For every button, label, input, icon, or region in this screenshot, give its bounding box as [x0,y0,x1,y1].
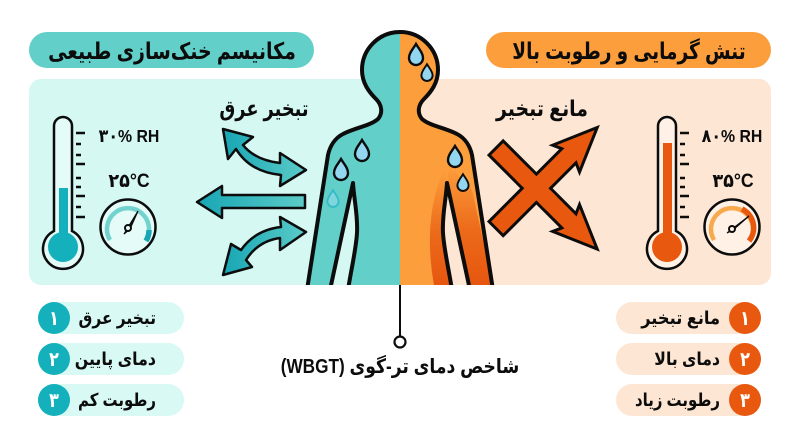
heading: heat stress and high humidity: تنش گرمایی و رطوبت بالا [512,38,746,65]
item: high humidity: ۳ [740,389,750,411]
thermometer: left [43,117,85,269]
panel: heat stress background [400,79,771,285]
readout: right humidity: ۸۰% RH [702,126,762,146]
heading: heat stress and high humidity [486,32,771,68]
illustration: human body [300,28,500,290]
item: high humidity [616,384,761,416]
arrow: upper curved double arrow [223,129,306,186]
gauge: left [100,200,156,254]
icon: blocked evaporation crossed arrows [483,114,611,263]
connector: body to WBGT label [394,285,406,348]
item: low temperature: دمای پایین [75,349,156,370]
label: WBGT index: شاخص دمای تر-گوی (WBGT) [281,355,519,378]
list: heat stress factors [616,302,761,416]
readout: left humidity: ۳۰% RH [99,126,159,146]
arrow: lower curved double arrow [223,217,306,275]
item: low humidity: ۳ [49,389,59,411]
item: high temperature [616,343,761,375]
item: low temperature [38,343,184,375]
item: sweat evaporation: ۱ [49,307,59,329]
gauge: right [704,200,760,254]
list: natural cooling factors [38,302,184,416]
heading: natural cooling mechanism: مکانیسم خنک‌سازی طبیعی [48,39,296,64]
item: evaporation blocked: مانع تبخیر [640,308,720,329]
item: high temperature: دمای بالا [654,349,720,369]
panel: natural cooling background [29,79,400,285]
readout: left temperature: ۲۵°C [108,169,150,191]
item: evaporation blocked [616,302,761,334]
item: high humidity: رطوبت زیاد [635,390,720,411]
arrow: middle outward arrow [197,186,305,218]
heading: natural cooling mechanism [29,32,314,68]
readout: right temperature: ۳۵°C [712,169,754,191]
thermometer: right [647,117,689,269]
item: high temperature: ۲ [740,348,750,370]
item: low humidity [38,384,184,416]
label: sweat evaporation: تبخیر عرق [219,97,309,121]
icon: sweat drops [327,44,469,207]
label: evaporation blocked: مانع تبخیر [495,97,588,121]
item: sweat evaporation: تبخیر عرق [79,308,156,329]
item: evaporation blocked: ۱ [740,307,750,329]
item: low humidity: رطوبت کم [78,390,156,411]
item: sweat evaporation [38,302,184,334]
item: low temperature: ۲ [49,348,59,370]
